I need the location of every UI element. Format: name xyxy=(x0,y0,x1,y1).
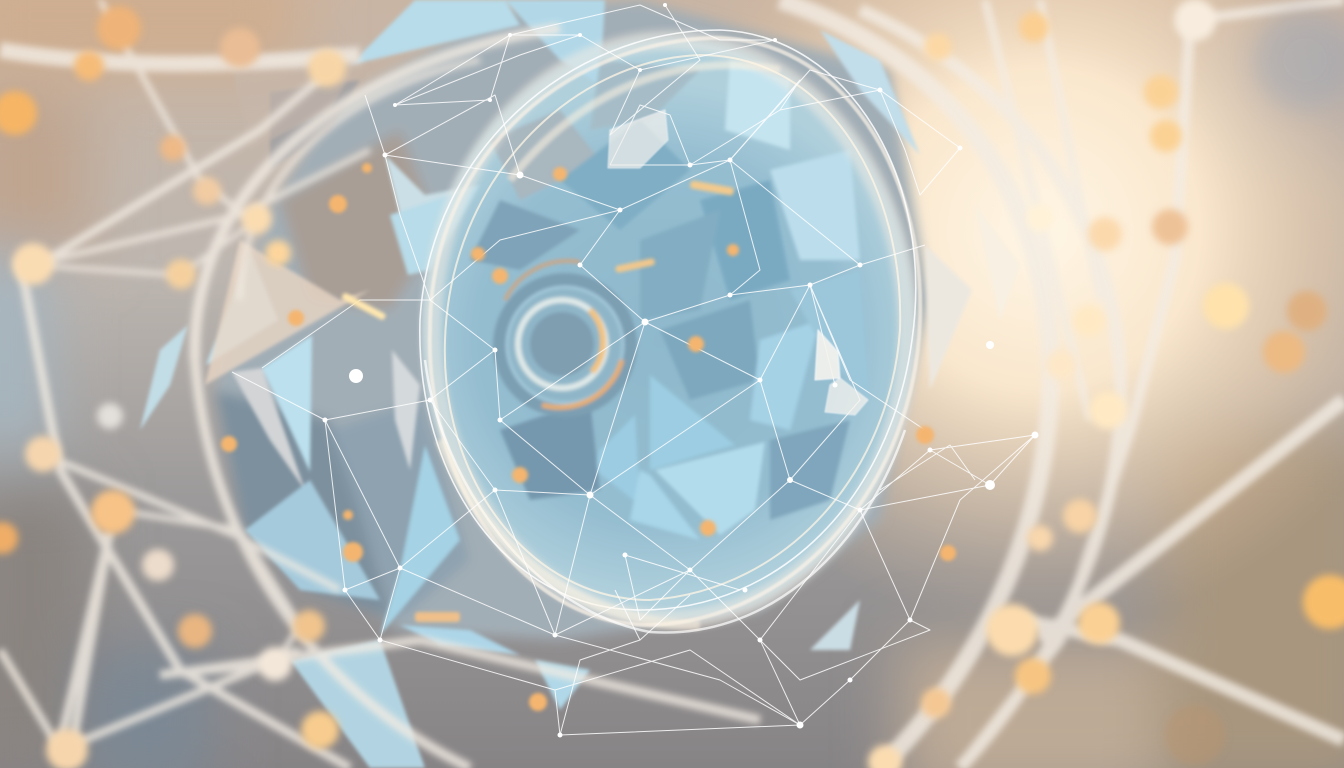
warm glow on the right xyxy=(560,0,1344,720)
central lens ring xyxy=(493,261,637,417)
light blue facets xyxy=(140,0,1020,768)
main translucent sphere ring xyxy=(420,30,920,633)
soft blue-grey orb top right xyxy=(1255,10,1344,110)
sharp white nodes xyxy=(322,3,1038,738)
bright warm streaks xyxy=(341,180,734,622)
polygon band around the sphere xyxy=(215,0,930,640)
small orange nodes xyxy=(221,163,956,711)
crystal shards xyxy=(608,110,868,415)
white polygon mesh lines xyxy=(232,5,1035,735)
sphere core xyxy=(422,38,914,622)
